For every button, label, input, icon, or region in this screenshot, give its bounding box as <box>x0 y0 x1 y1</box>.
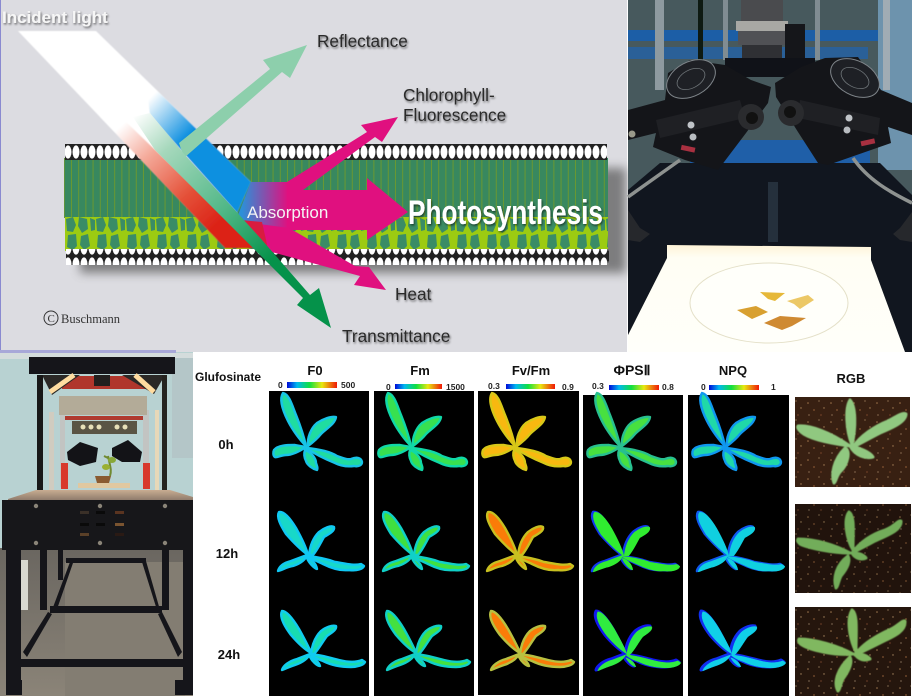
column: Fv/Fm <box>478 363 579 695</box>
illuminated sample stage <box>628 245 905 352</box>
label: chlorophyll fluorescence: Fluorescence <box>403 105 506 125</box>
column: Fv/Fm: 0.9 <box>562 382 574 392</box>
RGB photo: 12h <box>795 504 911 593</box>
copyright Buschmann: Buschmann <box>61 312 121 326</box>
arrow: chlorophyll fluorescence <box>287 117 398 192</box>
row label: 12h: 12h <box>216 546 238 561</box>
instrument plates <box>59 396 147 434</box>
column: Fm: 1500 <box>446 382 465 392</box>
panel: imaging system photo <box>0 350 193 696</box>
label: photosynthesis: Photosynthesis <box>408 194 603 232</box>
label: reflectance: Reflectance <box>317 31 408 51</box>
column: Fm: 0 <box>386 382 391 392</box>
RGB photo: 0h <box>795 397 910 487</box>
leaf cross-section <box>64 144 626 273</box>
RGB photo: 24h <box>795 607 911 696</box>
column: NPQ: NPQ <box>719 363 747 378</box>
column: F0 <box>269 363 369 696</box>
arrow: reflectance <box>179 45 307 158</box>
frame posts <box>37 375 167 493</box>
column: NPQ: 1 <box>771 382 776 392</box>
column: NPQ: 0 <box>701 382 706 392</box>
LED heads and plant <box>67 440 142 488</box>
panel: light fate in a leaf diagram <box>0 0 627 352</box>
stand feet <box>628 210 912 242</box>
arrow: transmittance <box>133 113 331 328</box>
panel: fluorometer camera photo <box>628 0 912 352</box>
right LED head <box>775 51 912 203</box>
label: incident light: Incident light <box>2 8 108 27</box>
column: Fv/Fm: 0.3 <box>488 381 500 391</box>
column: PhiPSII <box>583 362 683 696</box>
table legs <box>6 550 193 695</box>
copyright Buschmann: C <box>48 313 55 325</box>
label: absorption: Absorption <box>247 203 328 222</box>
left LED head <box>628 52 771 197</box>
label: transmittance: Transmittance <box>342 326 450 346</box>
column: PhiPSII: ΦPSⅡ <box>613 362 651 378</box>
column: F0: F0 <box>307 363 323 378</box>
arrow: absorption magenta <box>238 178 408 290</box>
column: Fm <box>374 363 474 696</box>
row label: 24h: 24h <box>218 647 240 662</box>
column: Fv/Fm: Fv/Fm <box>512 363 550 378</box>
column: F0: 0 <box>278 380 283 390</box>
column heading: RGB: RGB <box>837 371 865 386</box>
column: PhiPSII: 0.8 <box>662 382 674 392</box>
incident light beam <box>18 31 257 248</box>
lens <box>725 0 815 77</box>
top frame and lights <box>29 357 175 395</box>
label: chlorophyll fluorescence: Chlorophyll- <box>403 85 495 105</box>
row header: Glufosinate: Glufosinate <box>195 370 261 384</box>
row label: 0h: 0h <box>218 437 234 452</box>
column: NPQ <box>688 363 789 696</box>
column: Fm: Fm <box>410 363 430 378</box>
column: PhiPSII: 0.3 <box>592 381 604 391</box>
column: F0: 500 <box>341 380 355 390</box>
label: heat: Heat <box>395 284 432 304</box>
table top and black cabinet <box>2 490 193 550</box>
